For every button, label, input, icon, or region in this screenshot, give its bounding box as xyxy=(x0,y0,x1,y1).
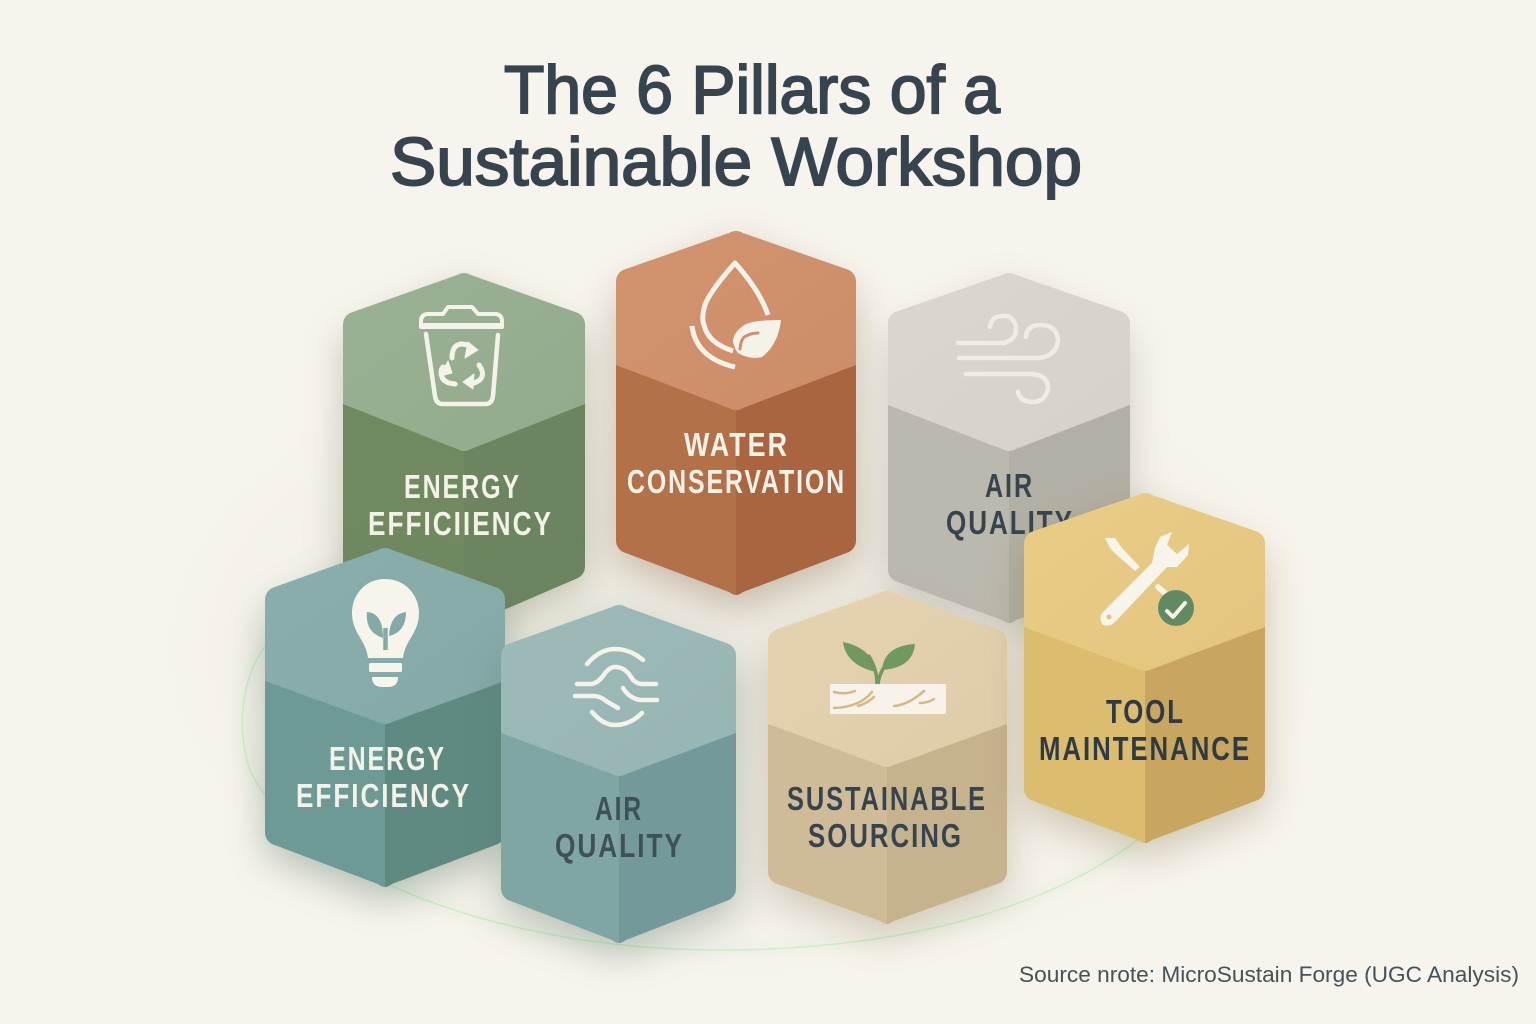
pillar: energy efficiency (teal) xyxy=(265,548,505,901)
label: water conservation xyxy=(627,426,846,500)
pillar: sustainable sourcing xyxy=(768,591,1007,938)
label: tool maintenance: MAINTENANCE xyxy=(1039,730,1251,767)
icon: recycling bin xyxy=(421,307,502,404)
label: sustainable sourcing: SUSTAINABLE xyxy=(787,780,987,817)
label: air quality (teal): QUALITY xyxy=(555,827,684,864)
pillar: green recycling xyxy=(343,273,585,641)
label: tool maintenance: TOOL xyxy=(1106,693,1185,730)
pillar: water conservation xyxy=(616,231,856,609)
green orbit ring xyxy=(242,640,1140,950)
title xyxy=(390,52,1082,200)
label: water conservation: WATER xyxy=(684,426,789,463)
label: energy efficiency (teal): ENERGY xyxy=(329,740,446,777)
icon: light bulb with leaves xyxy=(352,579,419,687)
pillar: air quality (teal) xyxy=(501,605,736,957)
label: water conservation: CONSERVATION xyxy=(627,463,846,500)
icon: water drop with leaf xyxy=(692,263,781,367)
icon: sprout on wood xyxy=(830,642,946,714)
label: energy efficiency (teal): EFFICIENCY xyxy=(296,777,471,814)
title: The 6 Pillars of a xyxy=(504,52,1000,128)
label: tool maintenance xyxy=(1039,693,1251,767)
pillar: air quality (grey) xyxy=(888,273,1130,637)
label: air quality (grey): AIR xyxy=(985,467,1034,504)
icon: wrench, screwdriver and check xyxy=(1100,532,1194,626)
label: energy efficiency (green): ENERGY xyxy=(404,468,521,505)
source note: Source nrote: MicroSustain Forge (UGC Analysis) xyxy=(1019,962,1519,987)
label: sustainable sourcing xyxy=(787,780,987,854)
label: energy efficiency (green): EFFICIIENCY xyxy=(368,505,553,542)
label: air quality (grey) xyxy=(946,467,1074,541)
label: energy efficiency (green) xyxy=(368,468,553,542)
pillar: tool maintenance xyxy=(1024,493,1265,857)
label: sustainable sourcing: SOURCING xyxy=(808,817,963,854)
icon: air flow waves xyxy=(575,649,657,725)
label: air quality (teal) xyxy=(555,790,684,864)
icon: wind xyxy=(958,316,1058,402)
label: air quality (grey): QUALITY xyxy=(946,504,1074,541)
title: Sustainable Workshop xyxy=(390,124,1082,200)
label: air quality (teal): AIR xyxy=(595,790,643,827)
label: energy efficiency (teal) xyxy=(296,740,471,814)
